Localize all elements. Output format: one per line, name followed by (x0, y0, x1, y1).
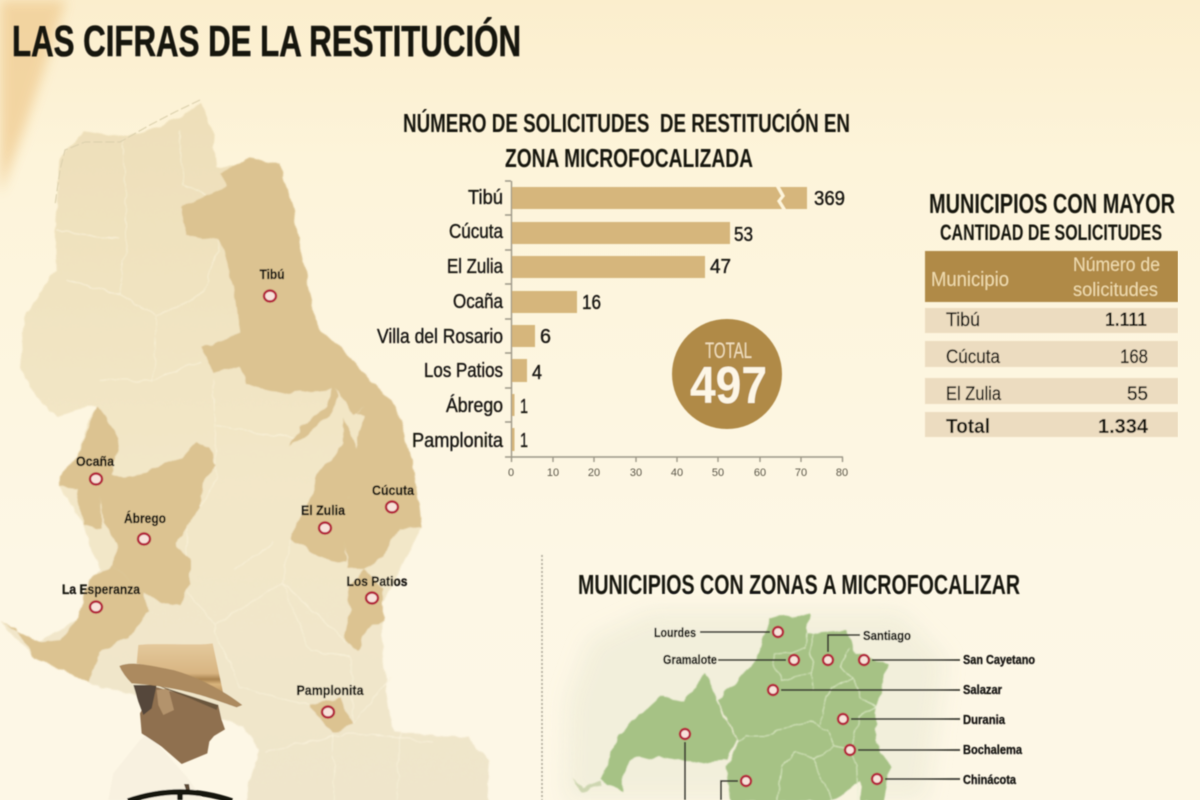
map label: Cúcuta: Cúcuta (372, 482, 414, 498)
axis labels: 50 (712, 467, 724, 479)
table: municipios con mayor cantidad (925, 251, 1178, 438)
row: Cúcuta (925, 341, 1178, 368)
bar: Tibú: Tibú (468, 187, 503, 209)
region: Tibú (182, 158, 383, 416)
chart heading: ZONA MICROFOCALIZADA (505, 143, 753, 173)
axis labels: 40 (671, 467, 683, 479)
bar: Pamplonita: 1 (520, 430, 528, 452)
green municipalities (600, 673, 737, 792)
map label: Ábrego (124, 510, 166, 544)
map label: Cúcuta (372, 482, 414, 512)
row: Tibú (925, 308, 1178, 333)
row: Tibú: 1.111 (1105, 310, 1147, 331)
pin: Bochalema: Bochalema (963, 742, 1023, 757)
pin: Chinácota: Chinácota (963, 772, 1017, 787)
pin: Lourdes: Lourdes (654, 625, 696, 640)
bar: Tibú: 369 (814, 188, 845, 210)
bar: Cúcuta (449, 221, 753, 246)
bar: Ocaña (453, 291, 601, 314)
table header (925, 251, 1178, 302)
row: Cúcuta: Cúcuta (946, 347, 1000, 368)
pin: Gramalote (663, 652, 799, 667)
region: Cúcuta (345, 391, 422, 570)
region: Pamplonita (310, 697, 353, 733)
pin: Chinácota (872, 772, 1017, 787)
total badge: 497 (690, 357, 767, 415)
total badge (672, 319, 782, 429)
bar: Ábrego: Ábrego (446, 394, 503, 417)
pin: San Cayetano (859, 652, 1035, 667)
row: Cúcuta: 168 (1120, 347, 1148, 368)
region: Los Patios (345, 570, 383, 651)
bar: Pamplonita: Pamplonita (412, 430, 504, 452)
row: Total (925, 412, 1178, 438)
axis labels: 10 (547, 467, 559, 479)
bar: Cúcuta: Cúcuta (449, 221, 504, 243)
map label: Pamplonita: Pamplonita (296, 682, 364, 698)
axis labels: 30 (630, 467, 642, 479)
map label: El Zulia: El Zulia (301, 502, 345, 518)
map: Norte de Santander municipalities (0, 100, 490, 800)
table header: solicitudes (1073, 280, 1158, 301)
pin: Salazar (768, 682, 1002, 697)
pin: Lourdes (654, 625, 783, 640)
map label: Tibú (260, 266, 284, 302)
municipalities map heading: MUNICIPIOS CON ZONAS A MICROFOCALIZAR (578, 569, 1020, 600)
pin: Bochalema (845, 742, 1023, 757)
map label: Ábrego: Ábrego (124, 510, 166, 526)
row: Total: Total (946, 416, 990, 438)
pale department silhouette (566, 612, 945, 800)
axis labels: 70 (795, 467, 807, 479)
steering wheel (128, 790, 232, 800)
bar: Cúcuta: 53 (734, 224, 753, 246)
map label: Tibú: Tibú (260, 266, 284, 282)
bar: El Zulia (447, 256, 731, 278)
map label: Ocaña (76, 453, 114, 484)
map label: La Esperanza: La Esperanza (62, 581, 140, 597)
bar: Villa del Rosario: Villa del Rosario (377, 326, 503, 348)
region: El Zulia (290, 416, 360, 561)
bar chart (377, 181, 848, 479)
pin: Gramalote: Gramalote (663, 652, 717, 667)
bar: Los Patios (424, 359, 542, 384)
bar: Ocaña: Ocaña (453, 291, 504, 313)
map label: El Zulia (301, 502, 345, 534)
bar: Los Patios: Los Patios (424, 360, 503, 382)
axis labels: 0 (508, 467, 514, 479)
table header: Municipio (931, 269, 1009, 291)
leader lines (685, 632, 960, 800)
bar: El Zulia: El Zulia (447, 256, 504, 278)
axis labels (508, 467, 848, 479)
map label: La Esperanza (62, 581, 140, 612)
bar: Ocaña: 16 (582, 292, 601, 314)
axis labels: 80 (836, 467, 848, 479)
row: El Zulia (925, 378, 1178, 405)
pin: south municipality (741, 776, 751, 786)
region: Tibú strip (290, 384, 340, 445)
pin: San Cayetano: San Cayetano (963, 652, 1035, 667)
region: Ocaña (58, 405, 118, 529)
axes (505, 181, 843, 462)
axis labels: 60 (754, 467, 766, 479)
row: El Zulia: 55 (1127, 384, 1148, 405)
dashed divider (541, 555, 543, 800)
pin: Durania (838, 712, 1006, 727)
row: El Zulia: El Zulia (946, 384, 1001, 405)
map label: Pamplonita (296, 682, 364, 718)
northern coast line (55, 100, 200, 205)
pin: Santiago (823, 628, 911, 665)
illustration: farmer with hat (108, 643, 242, 800)
total badge: TOTAL (705, 338, 752, 363)
axis labels: 20 (588, 467, 600, 479)
table header: Número de (1073, 255, 1160, 276)
pin: Santiago: Santiago (863, 628, 911, 643)
pin: Salazar: Salazar (963, 682, 1002, 697)
table heading (929, 188, 1175, 245)
region: Ábrego (100, 443, 217, 606)
map base (0, 104, 490, 800)
pin: west municipality (680, 729, 690, 739)
map label: Ocaña: Ocaña (76, 453, 114, 469)
bar: Tibú (468, 187, 845, 210)
green map (566, 612, 1035, 800)
map label: Los Patios (346, 573, 408, 604)
bar: Villa del Rosario: 6 (540, 326, 551, 348)
map label: Los Patios: Los Patios (346, 573, 408, 589)
row: Tibú: Tibú (946, 310, 980, 331)
region: La Esperanza (0, 565, 148, 683)
chart heading: NÚMERO DE SOLICITUDES DE RESTITUCIÓN EN (403, 108, 850, 138)
row: Total: 1.334 (1098, 416, 1149, 438)
bar: Los Patios: 4 (532, 362, 542, 384)
chart heading (403, 108, 850, 173)
pin: Durania: Durania (963, 712, 1006, 727)
title: LAS CIFRAS DE LA RESTITUCIÓN (12, 16, 521, 66)
bar: El Zulia: 47 (710, 256, 731, 278)
bar: Ábrego: 1 (520, 396, 528, 418)
